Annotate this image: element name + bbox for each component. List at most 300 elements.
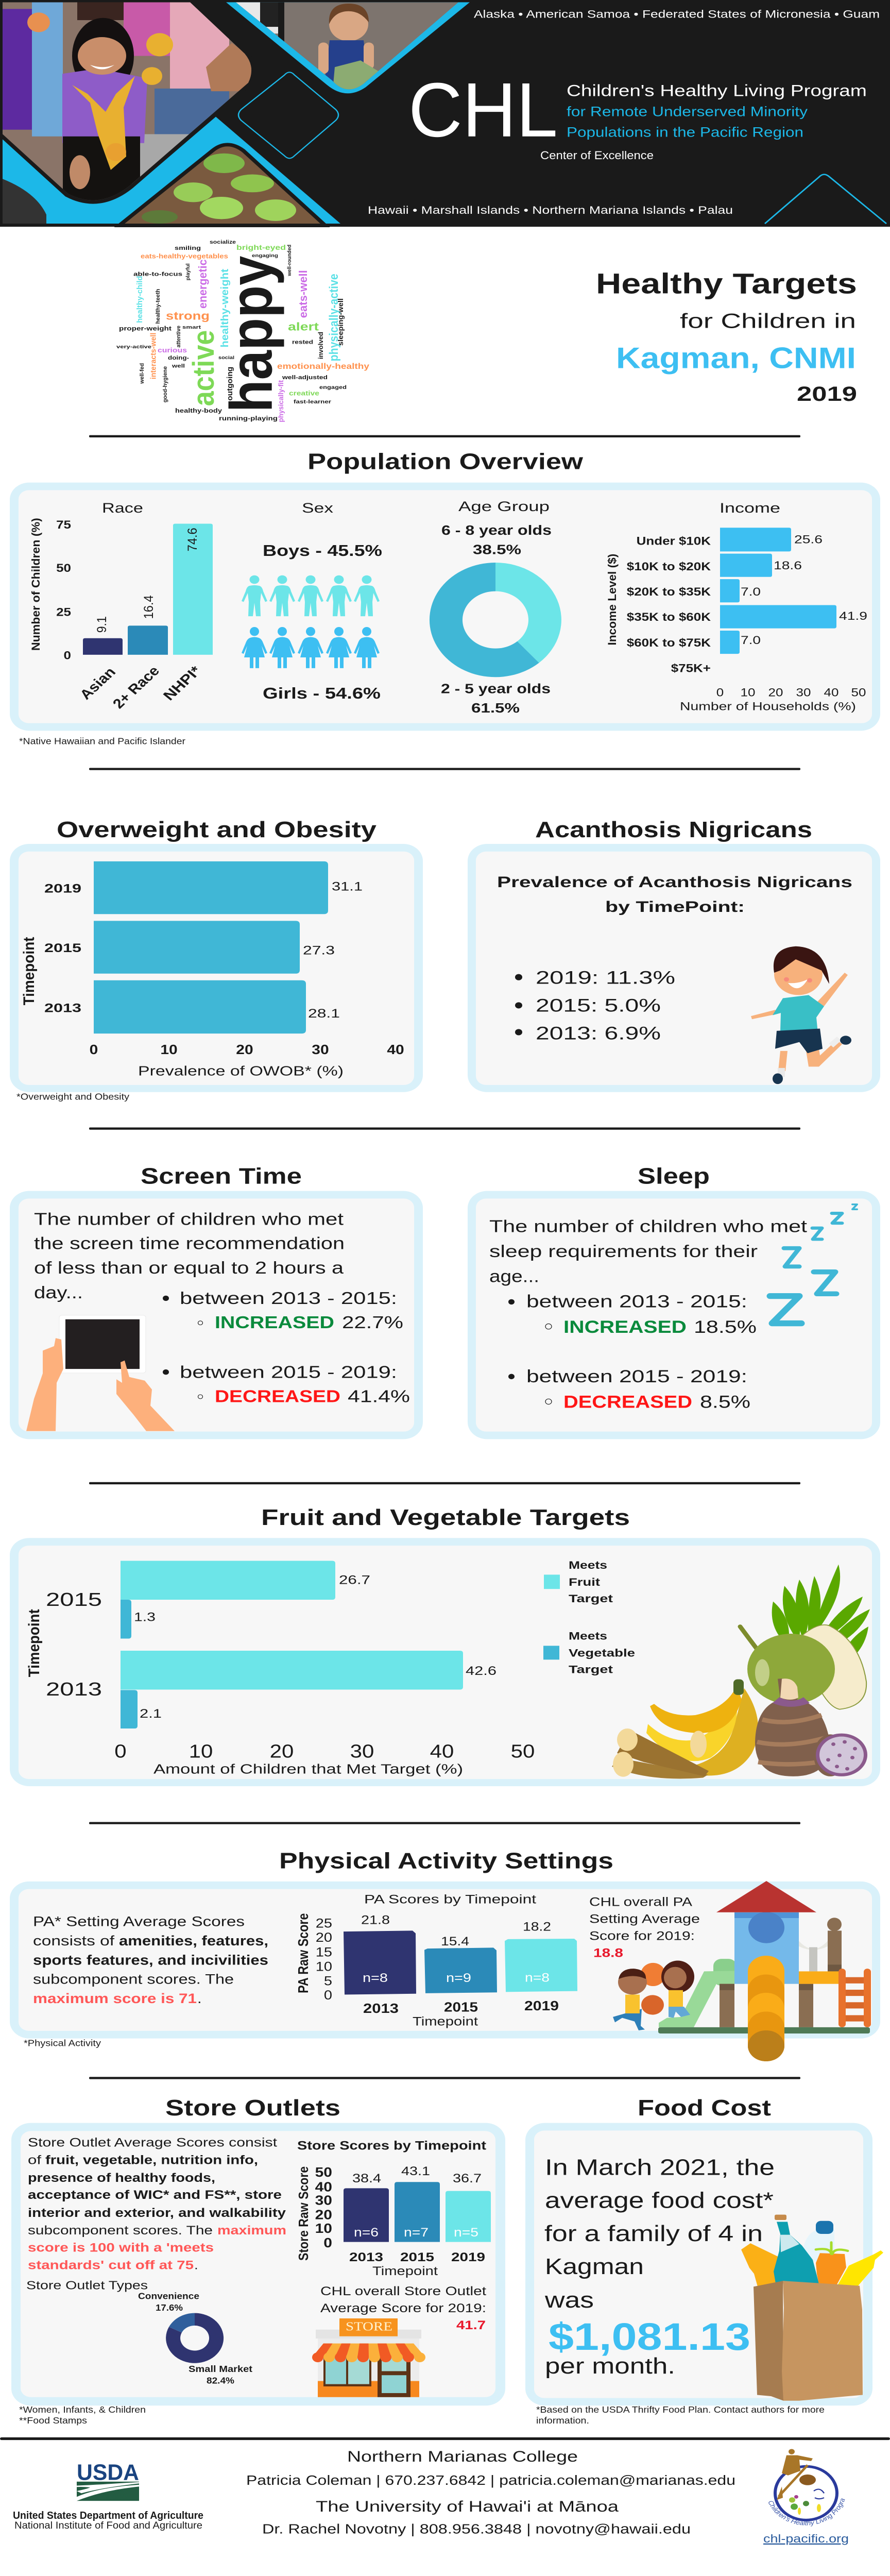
chart: PA scores by timepoint: n=8 (363, 1971, 388, 1985)
chart: PA scores by timepoint: 0 (324, 1988, 332, 2003)
word cloud: alert (288, 320, 319, 333)
chart: fruit and vegetable bars: 2015 (46, 1589, 102, 1611)
heading: Screen Time: Screen Time (141, 1164, 302, 1189)
word cloud: doing- (168, 354, 189, 361)
word cloud: smiling (175, 245, 201, 251)
banner text: program name: Children's Healthy Living Program (567, 82, 867, 100)
text: food cost statement: In March 2021, the (545, 2155, 775, 2180)
chart: race bar chart: 2+ Race (109, 663, 163, 711)
chart: income bar chart: 30 (796, 686, 811, 699)
legend: vegetable target (543, 1630, 635, 1675)
word cloud: interacts-well (149, 333, 158, 379)
footnote: NHPI: *Native Hawaiian and Pacific Islander (19, 736, 185, 746)
text: sleep description: sleep requirements for their (489, 1242, 758, 1261)
chart: fruit and vegetable bars: 20 (270, 1741, 294, 1762)
chart: PA scores by timepoint: 18.2 (523, 1919, 551, 1934)
panel: overweight and obesity chart: 30 (312, 1042, 329, 1057)
icon: playground with children (613, 1881, 871, 2061)
chart: store outlet types donut: 17.6% (156, 2302, 183, 2313)
text: store outlet description: of (28, 2153, 42, 2167)
list: sleep changes: DECREASED (563, 1392, 692, 1412)
chart: income bar chart: $10K to $20K (627, 560, 711, 573)
chart: race bar chart: 50 (56, 562, 71, 575)
chart: PA scores by timepoint: 15 (316, 1945, 332, 1959)
chart: fruit and vegetable bars (25, 1561, 535, 1776)
chart: income bar chart: 50 (851, 686, 866, 699)
panel: overweight and obesity chart: 31.1 (332, 879, 363, 893)
legend: fruit target: Target (569, 1593, 613, 1605)
legend: vegetable target: Target (569, 1664, 613, 1675)
chart: race bar chart: 25 (56, 606, 71, 619)
icon: sleeping Zs (770, 1205, 857, 1324)
chart: income bar chart (606, 501, 867, 713)
text: CHL overall PA score: 18.8 (593, 1945, 623, 1960)
panel: overweight and obesity chart: 40 (387, 1042, 404, 1057)
panel: overweight and obesity chart: Timepoint (20, 937, 37, 1005)
list: sleep changes (508, 1292, 757, 1412)
banner text: top regions: Alaska • American Samoa • Federated States of Micronesia • Guam (474, 8, 880, 20)
banner shape: diamond outline (238, 72, 338, 158)
word cloud: smart (182, 325, 201, 330)
legend: vegetable target: Meets (569, 1630, 607, 1642)
list: screen time changes: between 2013 - 2015: (180, 1289, 397, 1308)
footnote: food plan: information. (536, 2415, 589, 2426)
text: screen time description: the screen time recommendation (34, 1234, 345, 1253)
chart: store outlet types donut: Convenience (138, 2291, 199, 2301)
list: prevalence by year (515, 968, 675, 1044)
text: screen time description: of less than or equal to 2 hours a (34, 1259, 344, 1278)
chart: fruit and vegetable bars: 0 (114, 1741, 127, 1762)
photo: lettuce garden (125, 146, 320, 224)
icon: running boy (751, 946, 851, 1084)
chart: income bar chart: 10 (741, 686, 755, 699)
list: prevalence by year: 2013: 6.9% (536, 1023, 661, 1044)
chart: store scores by timepoint: 38.4 (352, 2171, 381, 2185)
chart: age group donut: 6 - 8 year olds (441, 523, 552, 538)
word cloud: sleeping-well (336, 298, 345, 346)
text: food cost statement: for a family of 4 in (544, 2221, 763, 2246)
icon: hands holding tablet (26, 1315, 175, 1431)
chart: store scores by timepoint: 2013 (349, 2250, 383, 2264)
list: screen time changes: INCREASED (215, 1313, 334, 1332)
banner shape: triangle outline (765, 175, 886, 224)
contact information: Northern Marianas College (347, 2448, 578, 2465)
word cloud: physically-active (327, 274, 340, 361)
list: screen time changes: between 2015 - 2019: (180, 1363, 397, 1382)
word cloud: rested (292, 338, 313, 345)
chart: store scores by timepoint: n=5 (454, 2225, 478, 2240)
chart: race bar chart: 9.1 (95, 616, 109, 633)
chart: income bar chart: 7.0 (741, 586, 761, 599)
text: PA setting description: . (197, 1991, 202, 2007)
chart: store outlet types donut: 82.4% (207, 2376, 234, 2385)
panel: population overview (10, 483, 880, 731)
text: store outlet description: Store Outlet Average Scores consist (28, 2135, 278, 2149)
chart: PA scores by timepoint: n=9 (446, 1971, 471, 1985)
text: sleep description (489, 1217, 807, 1286)
text: sleep description: age... (489, 1267, 539, 1286)
word cloud: fast-learner (294, 399, 332, 405)
chart: race bar chart: 75 (56, 519, 71, 532)
logo: Children's Healthy Living Program: Children's Healthy Living Program (768, 2499, 845, 2527)
chart: PA scores by timepoint: n=8 (525, 1970, 550, 1985)
heading: Fruit and Vegetable Targets: Fruit and Vegetable Targets (261, 1505, 630, 1530)
text: store outlet description: score is 100 with a 'meets (28, 2240, 214, 2255)
text: store outlet description: presence of healthy foods, (28, 2171, 215, 2185)
chart: income bar chart: Number of Households (%) (680, 700, 856, 713)
text: CHL overall PA score: CHL overall PA (589, 1894, 693, 1909)
word cloud: emotionally-healthy (277, 362, 370, 371)
word cloud: well-adjusted (282, 374, 328, 381)
photo: girl with lei (0, 0, 258, 206)
list: sleep changes: between 2015 - 2019: (526, 1367, 747, 1386)
contact information: Patricia Coleman | 670.237.6842 | patricia.coleman@marianas.edu (246, 2473, 735, 2487)
chart: income bar chart: Income Level ($) (606, 554, 619, 646)
text: CHL overall store outlet score: 41.7 (456, 2318, 486, 2332)
banner shape: dark border around lettuce photo (125, 146, 320, 224)
word cloud: attentive (176, 326, 182, 347)
chart: store scores by timepoint: 50 (315, 2165, 332, 2179)
chart: race bar chart: 0 (64, 649, 71, 662)
text: CHL overall store outlet score: CHL overall Store Outlet (320, 2284, 487, 2298)
word cloud: active (187, 330, 220, 406)
panel: overweight and obesity chart: Prevalence of OWOB* (%) (138, 1063, 344, 1078)
subtitle: year: 2019 (797, 383, 857, 405)
chart: fruit and vegetable bars: 2013 (46, 1679, 102, 1700)
panel: physical activity settings (10, 1882, 880, 2039)
word cloud: energetic (197, 259, 209, 309)
panel: overweight and obesity chart: 10 (160, 1042, 178, 1057)
word cloud: involved (317, 332, 324, 359)
footnote: store abbreviations: **Food Stamps (19, 2415, 87, 2426)
chart: fruit and vegetable bars: 50 (511, 1741, 535, 1762)
chart: race bar chart: 16.4 (142, 595, 156, 619)
chart: store scores by timepoint: 36.7 (453, 2171, 482, 2185)
icon: store front: STORE (346, 2319, 392, 2333)
chart: fruit and vegetable bars: 40 (430, 1741, 454, 1762)
chart: income bar chart: 20 (768, 686, 783, 699)
chart: income bar chart: 0 (716, 686, 724, 699)
text: store outlet description (28, 2135, 286, 2272)
footnote: store abbreviations: *Women, Infants, & Children (19, 2404, 146, 2415)
text: screen time description (34, 1210, 345, 1302)
panel: acanthosis nigricans: by TimePoint: (605, 898, 745, 915)
list: screen time changes (163, 1289, 410, 1406)
chart: income bar chart: Income (720, 501, 780, 516)
panel: food cost (525, 2123, 872, 2405)
word cloud: strong (166, 310, 210, 323)
chart: PA scores by timepoint: 2019 (524, 1998, 559, 2013)
panel: overweight and obesity chart: 28.1 (308, 1006, 340, 1020)
legend: fruit target (544, 1560, 613, 1605)
chart: income bar chart: 7.0 (741, 634, 761, 647)
chart: race bar chart: Race (102, 501, 143, 516)
word cloud: well (172, 363, 185, 369)
chart: sex pictogram: Girls - 54.6% (263, 684, 381, 702)
text: PA setting description: amenities, features, (119, 1934, 268, 1949)
chart: store scores by timepoint: Store Scores by Timepoint (297, 2138, 486, 2153)
text: store outlet description: . (194, 2258, 198, 2272)
heading: Acanthosis Nigricans: Acanthosis Nigricans (535, 817, 812, 842)
chart: store scores by timepoint (297, 2138, 491, 2278)
text: PA setting description (33, 1914, 268, 2007)
photo: toddler with bag (236, 2, 458, 90)
word cloud: very-active (116, 345, 151, 350)
chart: income bar chart: Under $10K (637, 535, 711, 548)
chart: fruit and vegetable bars: 1.3 (134, 1609, 156, 1624)
panel: sleep (468, 1191, 880, 1439)
legend: fruit target: Meets (569, 1560, 607, 1571)
chart: income bar chart: $20K to $35K (627, 586, 711, 599)
legend: fruit target: Fruit (569, 1577, 601, 1588)
chart: store scores by timepoint: 40 (315, 2179, 332, 2194)
banner shape: cyan corner (3, 117, 340, 224)
chart: store scores by timepoint: Timepoint (372, 2264, 438, 2278)
panel: overweight and obesity chart: 2013 (44, 1001, 81, 1015)
banner logo text: CHL: CHL (408, 67, 558, 153)
banner shape: cyan triangle frame (226, 2, 470, 93)
chart: sex pictogram (242, 501, 382, 702)
chart: PA scores by timepoint: PA Raw Score (295, 1913, 311, 1993)
text: store outlet description: subcomponent scores. The (28, 2223, 213, 2237)
text: food cost statement (544, 2155, 775, 2378)
heading: Population Overview: Population Overview (307, 449, 584, 474)
word cloud (116, 240, 370, 422)
text: food cost statement: $1,081.13 (549, 2315, 750, 2358)
banner shape: dark border around girl photo (3, 2, 251, 200)
panel: overweight and obesity chart: 20 (236, 1042, 253, 1057)
panel: acanthosis nigricans: Prevalence of Acanthosis Nigricans (497, 873, 852, 891)
banner text: program subtitle 2: Populations in the Pacific Region (567, 125, 803, 140)
list: sleep changes: 8.5% (700, 1392, 750, 1412)
banner text: center of excellence: Center of Excellence (540, 149, 654, 162)
text: sleep description: The number of children who met (489, 1217, 807, 1236)
chart: PA scores by timepoint: 5 (324, 1973, 332, 1988)
contact information (246, 2448, 735, 2536)
chart: fruit and vegetable bars: Timepoint (25, 1609, 42, 1677)
list: sleep changes: 18.5% (694, 1317, 757, 1336)
chart: store outlet types donut: Small Market (189, 2364, 252, 2374)
word cloud: playful (185, 263, 191, 280)
legend: vegetable target: Vegetable (569, 1647, 635, 1659)
chart: income bar chart: 18.6 (774, 560, 802, 572)
word cloud: eats-healthy-vegetables (141, 252, 228, 260)
chart: store scores by timepoint: 2015 (400, 2250, 434, 2264)
chart: race bar chart: 74.6 (185, 528, 199, 551)
icon: local fruits and vegetables (612, 1564, 870, 1778)
chart: store scores by timepoint: n=6 (354, 2225, 379, 2240)
chart: sex pictogram: Sex (302, 501, 334, 516)
word cloud: well-rounded (286, 245, 292, 277)
chart: PA scores by timepoint: 2013 (363, 2001, 399, 2016)
word cloud: well-fed (139, 363, 145, 384)
icon: store front (312, 2318, 425, 2397)
chart: race bar chart: Number of Children (%) (30, 518, 42, 651)
chart: PA scores by timepoint (295, 1892, 577, 2028)
list: screen time changes: DECREASED (215, 1387, 340, 1406)
word cloud: socialize (210, 240, 236, 245)
chart: age group donut: 61.5% (471, 701, 520, 715)
main title block (596, 267, 857, 405)
chart: store scores by timepoint: 0 (323, 2235, 332, 2250)
panel: screen time (10, 1191, 423, 1439)
text: PA setting description: consists of (33, 1934, 115, 1949)
logo: USDA: National Institute of Food and Agriculture (14, 2520, 202, 2531)
chart: PA scores by timepoint: PA Scores by Timepoint (364, 1892, 537, 1906)
text: CHL overall store outlet score (320, 2284, 487, 2332)
word cloud: healthy-weight (219, 269, 230, 347)
text: food cost statement: average food cost* (545, 2188, 774, 2213)
heading: Physical Activity Settings: Physical Activity Settings (279, 1849, 613, 1873)
text: store outlet description: acceptance of WIC* and FS**, store (28, 2188, 282, 2202)
chart: PA scores by timepoint: 2015 (444, 1999, 478, 2014)
chart: store scores by timepoint: 43.1 (401, 2164, 430, 2178)
text: PA setting description: subcomponent scores. The (33, 1972, 234, 1987)
chart: income bar chart: $60K to $75K (627, 637, 711, 650)
chart: PA scores by timepoint: 25 (316, 1916, 332, 1930)
chart: fruit and vegetable bars: 42.6 (466, 1664, 497, 1677)
word cloud: running-playing (219, 415, 278, 422)
chart: PA scores by timepoint: Timepoint (413, 2014, 478, 2028)
chart: age group donut (430, 499, 561, 715)
panel: overweight and obesity chart: 27.3 (303, 943, 335, 957)
text: screen time description: The number of children who met (34, 1210, 344, 1229)
word cloud: outgoing (225, 367, 234, 401)
word cloud: healthy-body (175, 407, 222, 414)
word cloud: eats-well (297, 270, 310, 318)
chart: race bar chart: NHPI* (160, 663, 204, 703)
chart: store outlet types donut: Store Outlet Types (26, 2279, 148, 2292)
chart: fruit and vegetable bars: 2.1 (140, 1706, 162, 1721)
text: store outlet description: maximum (217, 2223, 286, 2237)
panel: store outlets (11, 2123, 505, 2405)
panel: overweight and obesity chart (10, 844, 423, 1092)
text: food cost statement: was (544, 2287, 594, 2312)
heading: Food Cost: Food Cost (638, 2095, 771, 2120)
footnote: food plan (536, 2404, 825, 2426)
text: CHL overall PA score: Setting Average (589, 1911, 700, 1926)
chart: fruit and vegetable bars: 30 (350, 1741, 374, 1762)
chart: store scores by timepoint: 20 (315, 2207, 332, 2222)
logo: Children's Healthy Living Program: chl-pacific.org (763, 2532, 849, 2545)
word cloud: social (218, 355, 234, 361)
icon: grocery bag (741, 2215, 883, 2401)
chart: income bar chart: $35K to $60K (627, 611, 711, 623)
text: CHL overall store outlet score: Average Score for 2019: (320, 2301, 486, 2315)
chart: age group donut: Age Group (458, 499, 550, 515)
word cloud: curious (158, 346, 187, 354)
contact information: Dr. Rachel Novotny | 808.956.3848 | novotny@hawaii.edu (262, 2521, 691, 2536)
list: screen time changes: 41.4% (348, 1387, 410, 1406)
text: store outlet description: interior and exterior, and walkability (28, 2206, 286, 2220)
list: prevalence by year: 2015: 5.0% (536, 995, 661, 1016)
list: sleep changes: between 2013 - 2015: (526, 1292, 747, 1311)
word cloud: able-to-focus (133, 270, 182, 277)
chart: income bar chart: 41.9 (839, 610, 867, 623)
chart: fruit and vegetable bars: 10 (189, 1741, 213, 1762)
text: PA setting description: maximum score is 71 (33, 1991, 197, 2007)
list: sleep changes: INCREASED (563, 1317, 687, 1336)
text: PA setting description: PA* Setting Average Scores (33, 1914, 245, 1929)
banner text: program subtitle 1: for Remote Underserved Minority (567, 105, 808, 120)
chart: store outlet types donut (26, 2279, 252, 2385)
panel: overweight and obesity chart: 2019 (44, 881, 81, 895)
logo: USDA: United States Department of Agriculture (13, 2510, 203, 2521)
chart: age group donut: 38.5% (473, 542, 521, 557)
word cloud: bright-eyed (236, 244, 286, 252)
text: store outlet description: fruit, vegetable, nutrition info, (45, 2153, 258, 2167)
text: PA setting description: sports features, and incivilities (33, 1953, 268, 1968)
chart: store scores by timepoint: 30 (315, 2193, 332, 2208)
logo: USDA: USDA (77, 2460, 139, 2485)
chart: race bar chart: Asian (76, 665, 119, 702)
text: food cost statement: per month. (545, 2353, 675, 2378)
heading: Store Outlets: Store Outlets (165, 2095, 340, 2120)
heading: Sleep: Sleep (638, 1164, 710, 1189)
list: screen time changes: 22.7% (342, 1313, 403, 1332)
chart: age group donut: 2 - 5 year olds (441, 681, 551, 696)
chart: store scores by timepoint: 10 (315, 2221, 332, 2236)
word cloud: engaged (319, 385, 347, 391)
word cloud: engaging (252, 253, 278, 259)
chart: sex pictogram: Boys - 45.5% (263, 541, 382, 559)
chart: PA scores by timepoint: 10 (316, 1959, 332, 1974)
heading: Overweight and Obesity: Overweight and Obesity (57, 817, 376, 842)
logo: USDA (13, 2460, 203, 2531)
footnote: food plan: *Based on the USDA Thrifty Food Plan. Contact authors for more (536, 2404, 825, 2415)
chart: PA scores by timepoint: 21.8 (361, 1912, 390, 1927)
panel: fruit and vegetable targets (10, 1538, 880, 1786)
word cloud: healthy-child (135, 276, 144, 323)
text: food cost statement: Kagman (545, 2254, 644, 2279)
panel: overweight and obesity chart: 2015 (44, 941, 81, 955)
panel: overweight and obesity chart: 0 (90, 1042, 98, 1057)
chart: income bar chart: 40 (824, 686, 838, 699)
banner text: bottom regions: Hawaii • Marshall Islands • Northern Mariana Islands • Palau (368, 204, 733, 216)
word cloud: good-hygiene (162, 366, 168, 402)
word cloud: proper-weight (119, 325, 172, 332)
chart: income bar chart: $75K+ (671, 662, 711, 675)
banner: CHL program header (0, 0, 890, 227)
chart: income bar chart: 25.6 (794, 533, 823, 546)
title: Healthy Targets: Healthy Targets (596, 267, 857, 299)
text: CHL overall PA score: Score for 2019: (589, 1928, 695, 1943)
footnote: physical activity: *Physical Activity (24, 2038, 101, 2048)
chart: PA scores by timepoint: 20 (316, 1930, 332, 1945)
footnote: OWOB: *Overweight and Obesity (16, 1092, 130, 1101)
chart: store scores by timepoint: Store Raw Score (297, 2166, 311, 2261)
footnote: store abbreviations (19, 2404, 146, 2426)
chart: race bar chart (30, 501, 213, 711)
banner shape: dark corner (3, 179, 46, 224)
subtitle: for children in: for Children in (680, 310, 856, 333)
word cloud: happy (218, 256, 285, 412)
contact information: The University of Hawai'i at Mānoa (316, 2498, 619, 2515)
chart: store scores by timepoint: 2019 (451, 2250, 485, 2264)
word cloud: physically-fit (277, 380, 285, 422)
word cloud: creative (289, 389, 319, 397)
chart: PA scores by timepoint: 15.4 (441, 1934, 469, 1948)
text: screen time description: day... (34, 1283, 83, 1302)
word cloud: healthy-teeth (155, 289, 161, 324)
text: store outlet description: standards' cut off at 75 (28, 2258, 194, 2272)
list: prevalence by year: 2019: 11.3% (536, 968, 675, 988)
chart: fruit and vegetable bars: Amount of Children that Met Target (%) (153, 1762, 463, 1776)
panel: acanthosis nigricans (468, 844, 880, 1092)
subtitle: location: Kagman, CNMI (616, 342, 856, 375)
chart: store scores by timepoint: n=7 (404, 2225, 429, 2240)
text: CHL overall PA score (589, 1894, 700, 1960)
